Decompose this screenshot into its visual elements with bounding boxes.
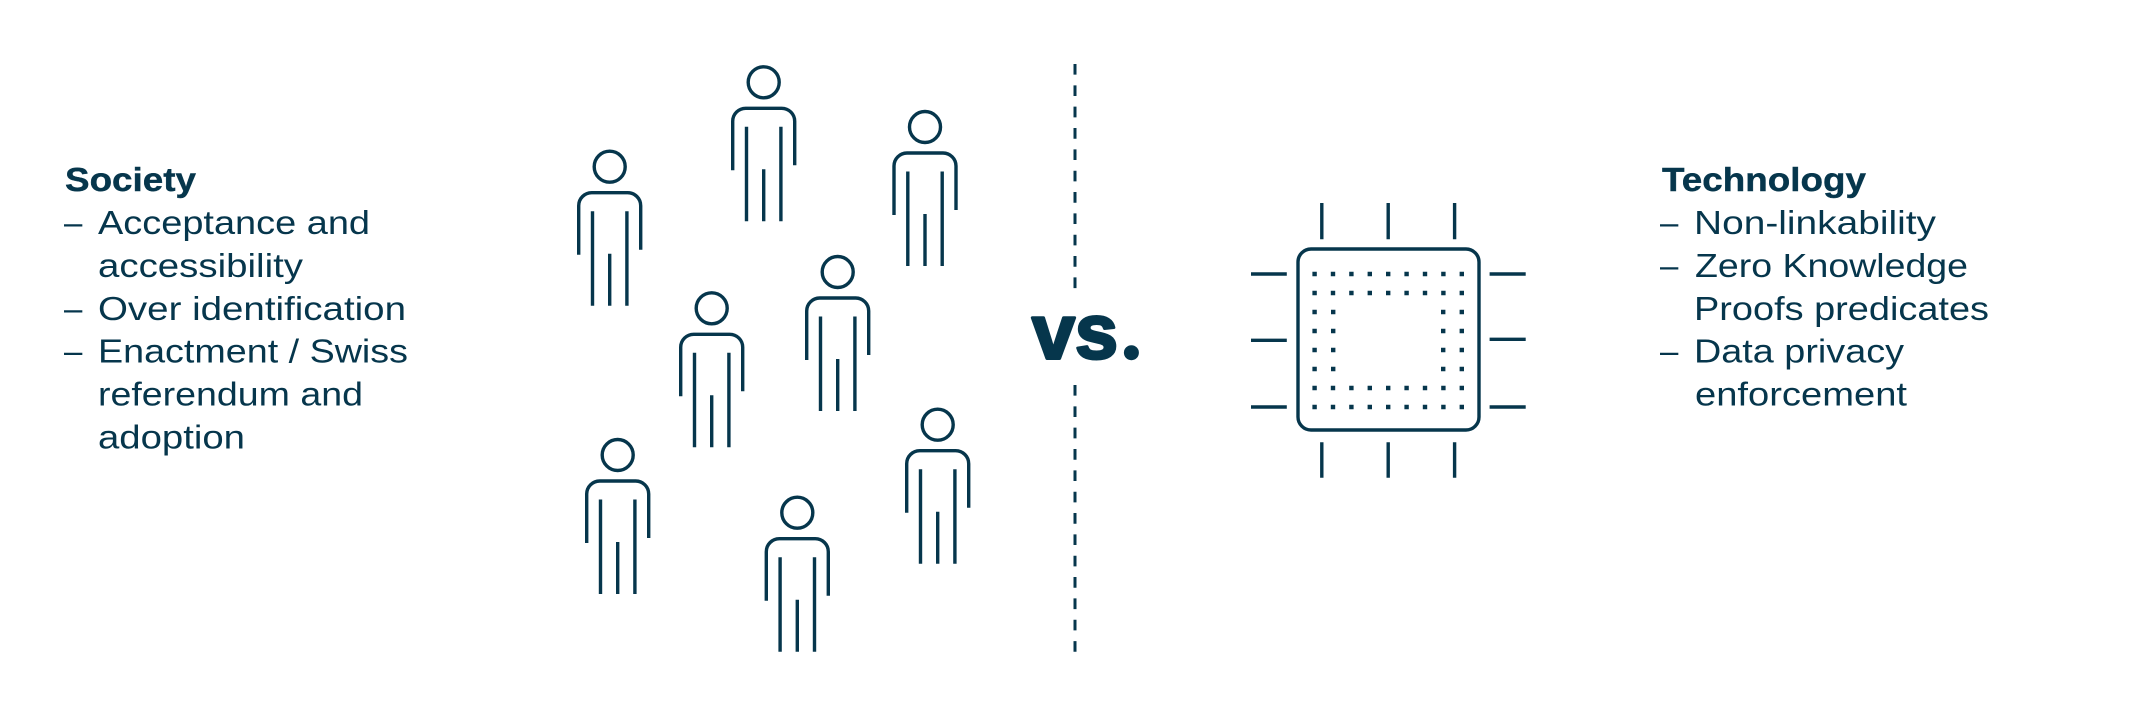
list item: enactment and adoption: –	[64, 332, 83, 370]
list item: zero knowledge proofs predicates: Zero Knowledge	[1695, 247, 1968, 284]
chip dot grid	[1312, 274, 1465, 407]
icon: person 1	[579, 151, 641, 306]
list item: acceptance and accessibility: Acceptance and	[98, 204, 370, 241]
list item: non-linkability: Non-linkability	[1694, 204, 1937, 241]
list item: enactment and adoption: Enactment / Swiss	[98, 332, 408, 370]
list item: data privacy enforcement: Data privacy	[1694, 332, 1905, 370]
icon: person 6	[587, 440, 649, 594]
chip body	[1298, 249, 1479, 430]
icon: person 7	[907, 409, 969, 564]
list item: data privacy enforcement: –	[1660, 332, 1679, 370]
list item: acceptance and accessibility	[64, 204, 370, 284]
list item: enactment and adoption	[64, 332, 408, 456]
icon group: people	[579, 67, 969, 652]
text block: society	[64, 161, 408, 456]
icon: person 2	[733, 67, 795, 221]
divider: dashed line top and bottom	[1074, 64, 1076, 652]
label: vs.: .	[1127, 337, 1134, 364]
icon: person 5	[681, 293, 743, 447]
list item: over identification: Over identification	[98, 290, 406, 327]
list item: data privacy enforcement	[1660, 332, 1907, 412]
icon: person 8	[766, 497, 828, 652]
icon: microchip	[1251, 203, 1526, 478]
list item: over identification: –	[64, 290, 83, 327]
label: vs.: vs	[1032, 290, 1118, 376]
heading: society: Society	[65, 161, 197, 198]
icon: person 4	[807, 256, 869, 411]
list item: enactment and adoption: adoption	[98, 418, 245, 456]
list item: acceptance and accessibility: –	[64, 204, 83, 241]
list item: zero knowledge proofs predicates	[1660, 247, 1989, 327]
heading: technology: Technology	[1662, 161, 1867, 198]
text block: technology	[1660, 161, 1989, 412]
list item: acceptance and accessibility: accessibility	[98, 247, 304, 284]
list item: non-linkability: –	[1660, 204, 1679, 241]
list item: zero knowledge proofs predicates: Proofs predicates	[1694, 290, 1989, 327]
list item: enactment and adoption: referendum and	[98, 376, 363, 412]
icon: person 3	[894, 112, 956, 266]
chip pins	[1251, 203, 1526, 478]
list item: zero knowledge proofs predicates: –	[1660, 247, 1679, 284]
list item: data privacy enforcement: enforcement	[1695, 376, 1907, 412]
